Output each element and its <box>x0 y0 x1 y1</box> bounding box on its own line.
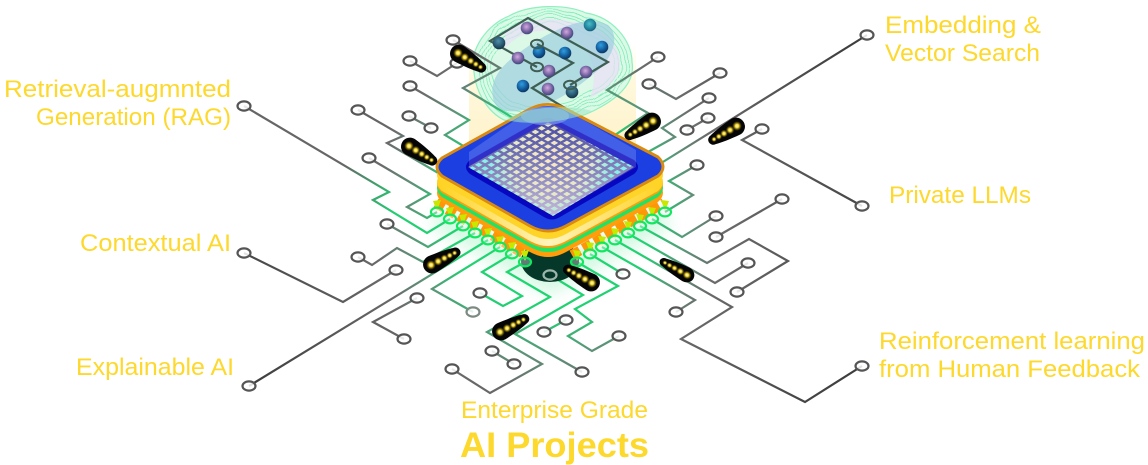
label: Retrieval-augmented Generation <box>4 76 231 131</box>
title <box>460 397 649 465</box>
title: AI Projects <box>460 426 649 465</box>
brain neurons <box>493 19 608 98</box>
label: Retrieval-augmented Generation: Generation (RAG) <box>36 104 231 131</box>
label: Embedding and Vector Search <box>885 12 1041 67</box>
green chip contact rings <box>431 208 671 266</box>
connector pads <box>238 30 874 391</box>
label: Explainable AI: Explainable AI <box>76 354 234 381</box>
label: Reinforcement learning: Reinforcement learning <box>879 328 1145 355</box>
circuit traces <box>244 18 867 402</box>
brain hologram <box>473 7 632 124</box>
chip pin drips <box>433 200 669 261</box>
title: Enterprise Grade <box>461 397 648 424</box>
label: Embedding and Vector Search: Embedding & <box>885 12 1041 39</box>
processor chip <box>436 104 664 257</box>
label: Contextual AI: Contextual AI <box>80 230 231 257</box>
glowing capsules on traces <box>398 41 748 344</box>
label: Reinforcement learning <box>879 328 1145 383</box>
light beam above chip <box>469 45 636 170</box>
label: Retrieval-augmented Generation: Retrieval-augmnted <box>4 76 231 103</box>
label: Embedding and Vector Search: Vector Search <box>885 40 1040 67</box>
soft green glow beneath pins <box>437 215 665 280</box>
label: Reinforcement learning: from Human Feedback <box>879 356 1141 383</box>
dark socket under chip <box>521 240 579 282</box>
label: Private LLMs: Private LLMs <box>889 182 1031 209</box>
